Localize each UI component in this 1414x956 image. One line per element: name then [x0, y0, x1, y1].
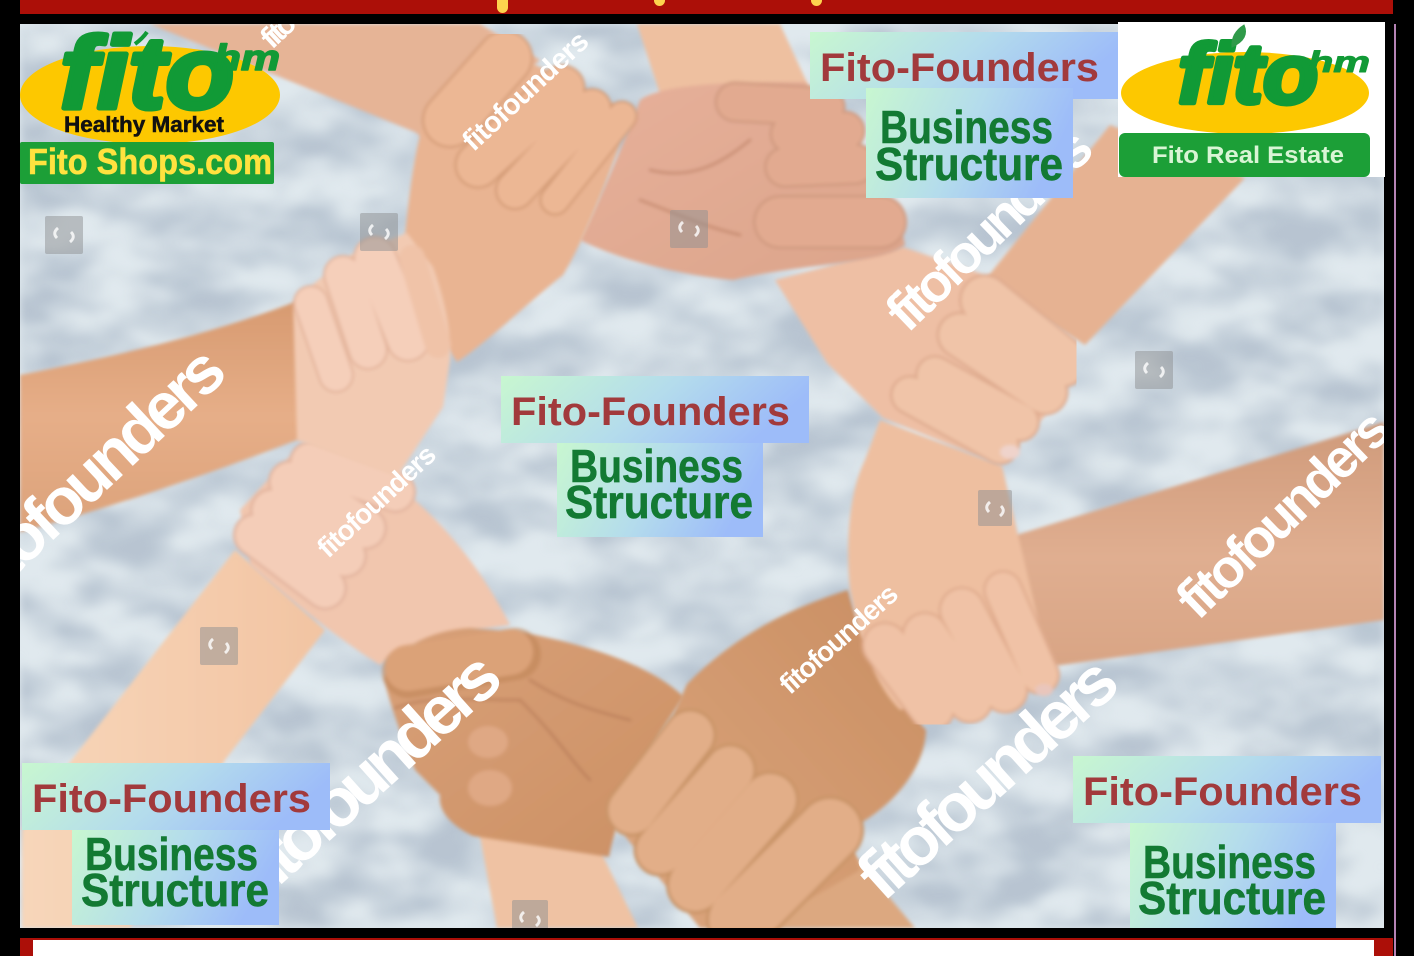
logo: Fito Shops: fito: [60, 16, 234, 130]
hand: bottom centre: [384, 628, 684, 857]
fitofounders watermarks: fitofounders: [311, 439, 442, 564]
label: bottom right: Fito-Founders: [1083, 770, 1362, 814]
right edge line: [1394, 24, 1396, 956]
label: bottom right: Structure: [1138, 872, 1326, 924]
hand: top centre: [580, 82, 905, 280]
hand: upper right: [775, 247, 1062, 465]
logo: Fito Shops: Healthy Market: [64, 112, 225, 137]
top red banner: [20, 0, 1393, 14]
fitofounders watermarks: fitofounders: [843, 642, 1133, 914]
label: bottom right: [1073, 756, 1381, 928]
label: centre: [501, 376, 809, 537]
fitofounders watermarks: fitofounders: [874, 117, 1105, 343]
hand: lower left: [240, 445, 510, 665]
label: bottom left: Business: [85, 828, 258, 880]
hand: bottom: [620, 590, 926, 928]
label: centre: Business: [570, 440, 743, 492]
label: top right: Fito-Founders: [820, 46, 1099, 90]
label: top right: Business: [880, 101, 1053, 153]
fitofounders watermarks: fito: [254, 6, 303, 55]
fitofounders watermarks: fitofounders: [226, 637, 516, 909]
bottom red and white panel: [20, 938, 1393, 956]
logo: Fito Shops: hm: [214, 37, 280, 78]
label: centre: Structure: [565, 476, 753, 528]
logo: Fito Real Estate: hm: [1308, 46, 1370, 79]
hand: top left: [405, 50, 632, 362]
hand: right: [848, 420, 1053, 710]
logo: Fito Shops: [20, 16, 280, 184]
hand: left: [293, 233, 450, 477]
label: bottom left: Structure: [81, 864, 269, 916]
label: bottom left: Fito-Founders: [32, 777, 311, 821]
label: centre: Fito-Founders: [511, 390, 790, 434]
watermark stamps: [45, 210, 1173, 936]
logo: Fito Real Estate: fito: [1178, 27, 1318, 121]
fitofounders watermarks: fitofounders: [456, 25, 595, 158]
label: top right: Structure: [875, 138, 1063, 190]
fitofounders watermarks: fitofounders: [773, 578, 904, 700]
label: bottom right: Business: [1143, 836, 1316, 888]
logo: Fito Shops: Fito Shops.com: [28, 141, 272, 182]
label: bottom left: [22, 763, 330, 925]
fitofounders watermarks: fitofounders: [1165, 398, 1402, 630]
logo: Fito Real Estate: [1118, 22, 1385, 177]
label: top right: [810, 32, 1118, 198]
logo: Fito Real Estate: Fito Real Estate: [1152, 142, 1344, 169]
